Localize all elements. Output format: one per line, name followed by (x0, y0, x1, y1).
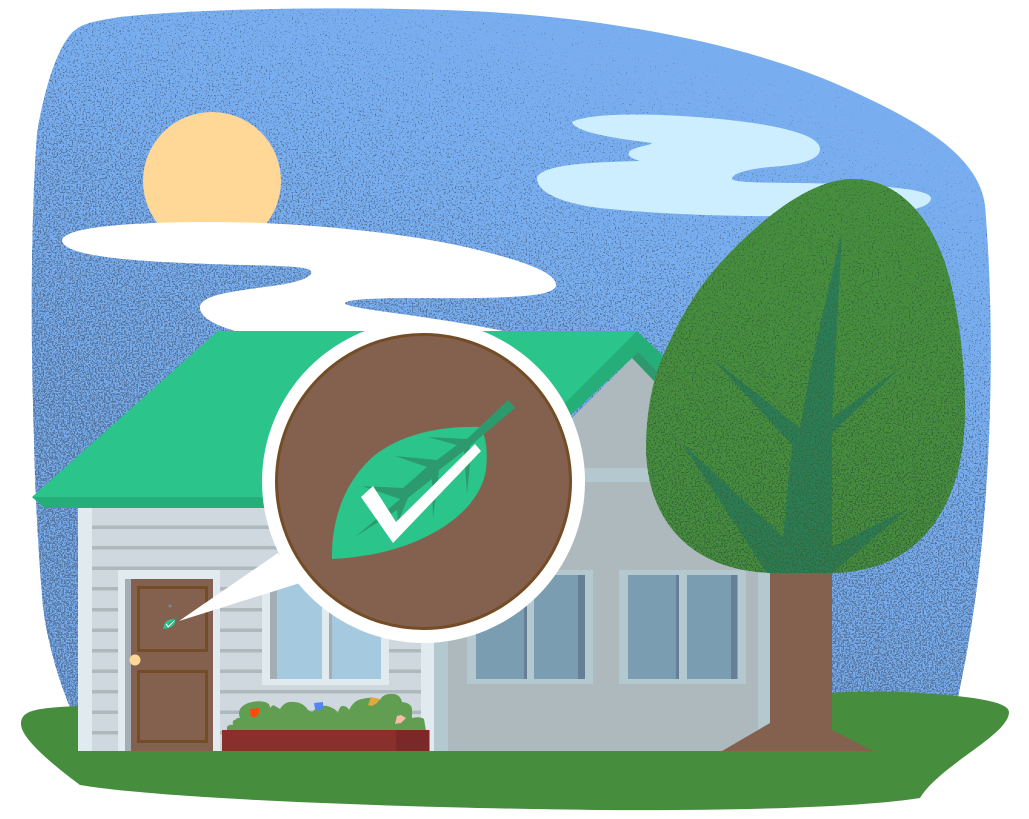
tree (640, 170, 970, 751)
door (118, 570, 220, 751)
canopy (646, 179, 965, 573)
bush (227, 694, 426, 731)
canopy texture (640, 170, 970, 580)
icon: pale blue cloud (537, 114, 931, 216)
roof (32, 331, 637, 508)
left corner trim of gable wing (434, 600, 448, 751)
leaf blade (332, 427, 487, 559)
gable band (560, 468, 680, 482)
check mark (361, 444, 481, 543)
flower pink (395, 715, 406, 724)
planter with bush (222, 694, 430, 752)
branches (682, 232, 909, 573)
flower red (250, 708, 259, 717)
panel: house (32, 331, 770, 751)
roof ridge shadow (550, 331, 672, 425)
icon: tiny leaf on door (163, 617, 177, 629)
window: right pair (619, 570, 746, 684)
right corner trim (758, 570, 770, 735)
trunk (722, 570, 873, 751)
window: left pair (262, 570, 389, 685)
planter box (222, 730, 430, 752)
left trim (78, 505, 92, 751)
icon: white cloud (62, 222, 556, 345)
panel: ground (21, 692, 1009, 810)
badge ring (262, 320, 585, 643)
flower orange (368, 697, 380, 706)
badge disc (276, 334, 570, 628)
panel: sky background (32, 8, 991, 706)
icon: sun (143, 112, 281, 250)
siding wall (78, 505, 434, 751)
roof ridge inner (632, 352, 662, 381)
right trim (421, 620, 434, 751)
siding lines (92, 526, 421, 734)
planter shade (396, 730, 430, 752)
callout with leaf badge (179, 320, 585, 643)
flower blue (314, 702, 323, 711)
window: middle pair (467, 570, 593, 684)
leaf veins (355, 400, 515, 537)
callout tail (179, 553, 300, 621)
icon: leaf with check (332, 400, 515, 559)
roof eave shadow (32, 497, 300, 508)
ground strip (60, 751, 900, 765)
gable wall (430, 358, 770, 751)
